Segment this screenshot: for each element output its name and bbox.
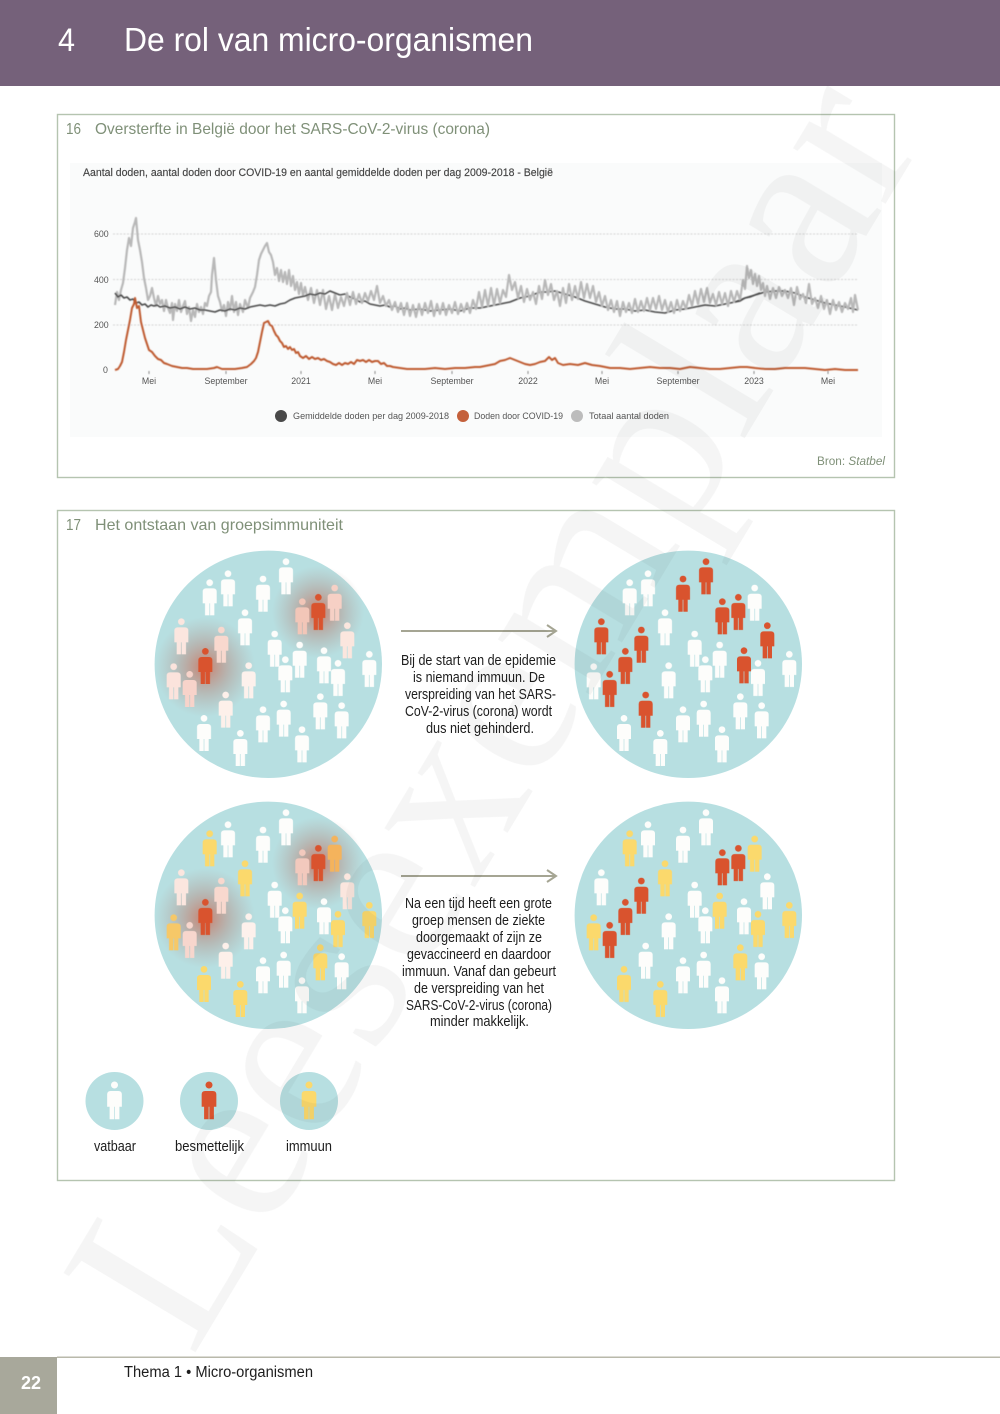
text: na een tijd: immuun. Vanaf dan gebeurt [402,963,557,980]
chapter number: 4 [58,22,75,58]
legend item: vatbaar: vatbaar [94,1138,136,1155]
chart axis labels: 400 [94,275,109,285]
text: na een tijd: SARS-CoV-2-virus (corona) [406,997,552,1014]
chart axis labels: 2023 [744,376,764,386]
text: na een tijd: minder makkelijk. [430,1013,529,1030]
source credit: Bron: Statbel [817,456,885,468]
circle: start epidemie, verspreid [575,551,802,778]
text: bij de start: Bij de start van de epidemie [401,652,556,669]
legend item: vatbaar [86,1072,144,1155]
chart axis labels: 2021 [291,376,311,386]
text: na een tijd: gevaccineerd en daardoor [407,946,551,963]
chart axis labels: September [656,376,700,386]
legend item: immuun [280,1072,338,1155]
chart axis labels: Mei [142,376,156,386]
chart axis labels: 200 [94,320,109,330]
series: gemiddelde doden (boven) [115,291,340,312]
arrow: bottom [401,870,556,882]
panel heading 17: 17 [66,517,81,534]
legend [86,1072,338,1155]
chart legend: Doden door COVID-19 [474,411,563,421]
line chart [113,218,858,374]
arrow: top [401,625,556,637]
chart axis labels: 600 [94,229,109,239]
legend item: besmettelijk [175,1072,244,1155]
text: bij de start: verspreiding van het SARS- [405,686,556,703]
chart title: Aantal doden, aantal doden door COVID-19 en aantal gemiddelde doden per dag 2009-2018 - België [83,167,553,179]
panel heading 16: Oversterfte in België door het SARS-CoV-2-virus (corona) [95,121,490,138]
chart axis labels: 2022 [518,376,538,386]
panel: groepsimmuniteit [58,510,894,1180]
legend item: immuun: immuun [286,1138,332,1155]
legend item: besmettelijk: besmettelijk [175,1138,244,1155]
text: na een tijd: de verspreiding van het [414,980,545,997]
text: bij de start: dus niet gehinderd. [426,720,534,737]
series: totaal aantal doden [115,218,858,321]
panel heading 16: 16 [66,121,81,138]
circle: groepsimmuniteit, begin [155,802,382,1029]
chart axis labels: 0 [103,365,108,375]
series: gemiddelde doden (onder) [340,291,858,313]
chart axis labels: Mei [821,376,835,386]
series: doden door COVID-19 [115,298,858,370]
text: na een tijd [402,895,557,1030]
chapter title: De rol van micro-organismen [124,21,533,58]
chart background [70,163,882,437]
page number box [0,1357,57,1414]
header bar [0,0,1000,86]
text: na een tijd: groep mensen de ziekte [412,912,545,929]
chart legend [275,410,669,422]
chart axis labels: Mei [595,376,609,386]
watermark: Leesexemplaar [13,33,967,1384]
chart axis labels: Mei [368,376,382,386]
text: bij de start [401,652,556,737]
footer [0,1356,1000,1414]
circle: groepsimmuniteit, verspreid [575,802,802,1029]
text: na een tijd: Na een tijd heeft een grote [405,895,552,912]
text: na een tijd: doorgemaakt of zijn ze [416,929,542,946]
chart legend: Gemiddelde doden per dag 2009-2018 [293,411,449,421]
text: bij de start: is niemand immuun. De [413,669,545,686]
chart axis labels: September [430,376,474,386]
circle: start epidemie, begin [155,551,382,778]
page number: 22 [21,1373,41,1393]
chart axis labels [94,229,835,386]
text: bij de start: CoV-2-virus (corona) wordt [405,703,553,720]
panel heading 17: Het ontstaan van groepsimmuniteit [95,517,344,534]
running footer text: Thema 1 • Micro-organismen [124,1364,313,1381]
panel: oversterfte chart [58,114,894,478]
chart axis labels: September [204,376,248,386]
chart legend: Totaal aantal doden [589,411,669,421]
